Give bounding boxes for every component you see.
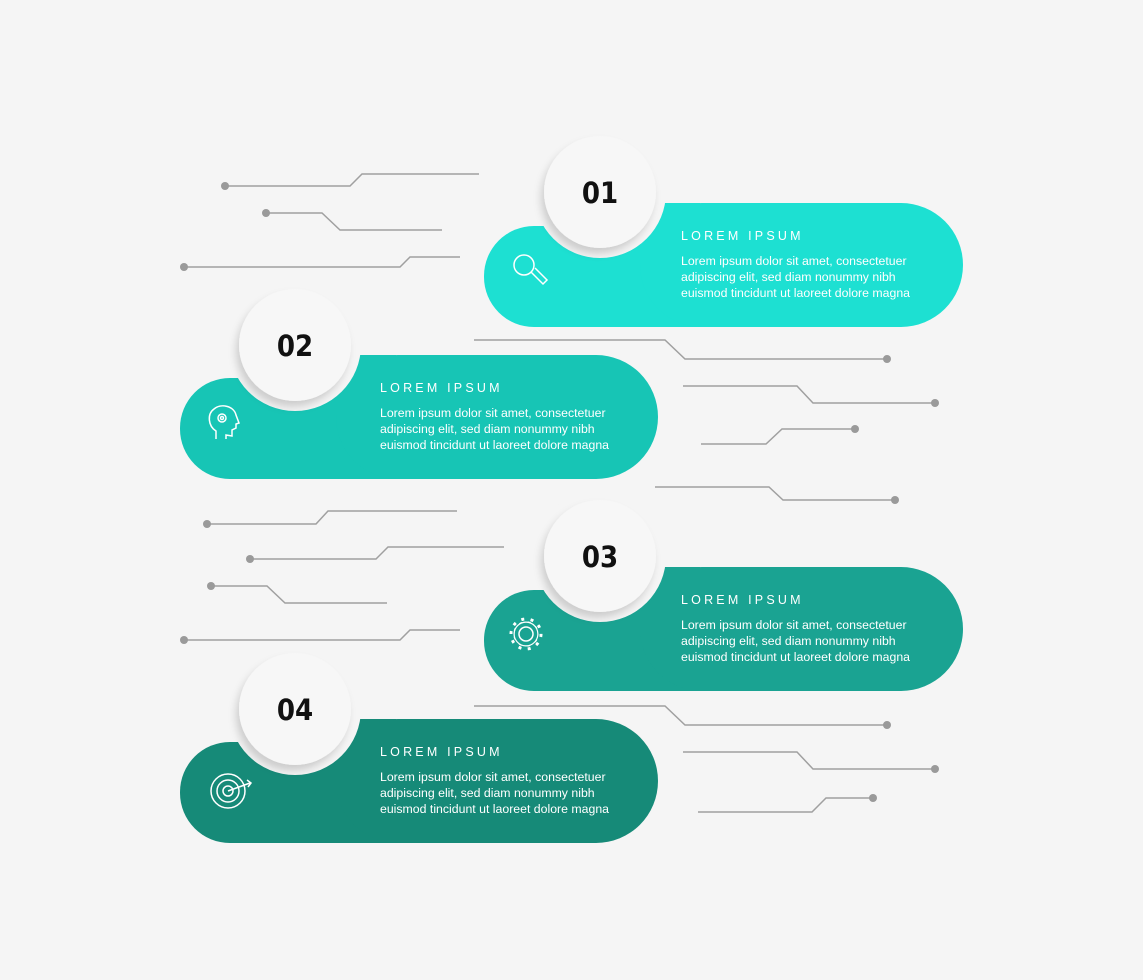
text 3: LOREM IPSUM (681, 593, 804, 607)
connector lines right middle (474, 340, 939, 504)
number circle 04 (239, 653, 351, 765)
connector lines left middle (180, 511, 504, 644)
icon: gear (511, 619, 541, 649)
panel 4 (180, 643, 658, 843)
number circle 03 (544, 500, 656, 612)
panel 3 (484, 490, 963, 691)
text 1: Lorem ipsum dolor sit amet, consectetuer (681, 254, 907, 268)
text 2: Lorem ipsum dolor sit amet, consectetuer (380, 406, 606, 420)
text 3: euismod tincidunt ut laoreet dolore magna (681, 650, 910, 664)
icon: target (211, 774, 251, 808)
text 4: LOREM IPSUM (380, 745, 503, 759)
text 4 (380, 745, 609, 816)
text 2 (380, 381, 609, 452)
number circle 02: 02 (277, 329, 313, 363)
text 3: adipiscing elit, sed diam nonummy nibh (681, 634, 896, 648)
number circle 02 (239, 289, 351, 401)
text 1: LOREM IPSUM (681, 229, 804, 243)
text 2: euismod tincidunt ut laoreet dolore magna (380, 438, 609, 452)
text 1: adipiscing elit, sed diam nonummy nibh (681, 270, 896, 284)
text 3: Lorem ipsum dolor sit amet, consectetuer (681, 618, 907, 632)
text 4: Lorem ipsum dolor sit amet, consectetuer (380, 770, 606, 784)
number circle 04: 04 (277, 693, 313, 727)
text 4: adipiscing elit, sed diam nonummy nibh (380, 786, 595, 800)
text 3 (681, 593, 910, 664)
text 2: LOREM IPSUM (380, 381, 503, 395)
panel 2 (180, 279, 658, 479)
icon: magnifier (514, 255, 547, 284)
connector lines right bottom (474, 706, 939, 812)
text 1 (681, 229, 910, 300)
icon: head with gear (209, 406, 239, 439)
text 1: euismod tincidunt ut laoreet dolore magna (681, 286, 910, 300)
number circle 01: 01 (582, 176, 618, 210)
text 4: euismod tincidunt ut laoreet dolore magna (380, 802, 609, 816)
text 2: adipiscing elit, sed diam nonummy nibh (380, 422, 595, 436)
connector lines top left (180, 174, 479, 271)
number circle 01 (544, 136, 656, 248)
number circle 03: 03 (582, 540, 618, 574)
panel 1 (484, 126, 963, 327)
